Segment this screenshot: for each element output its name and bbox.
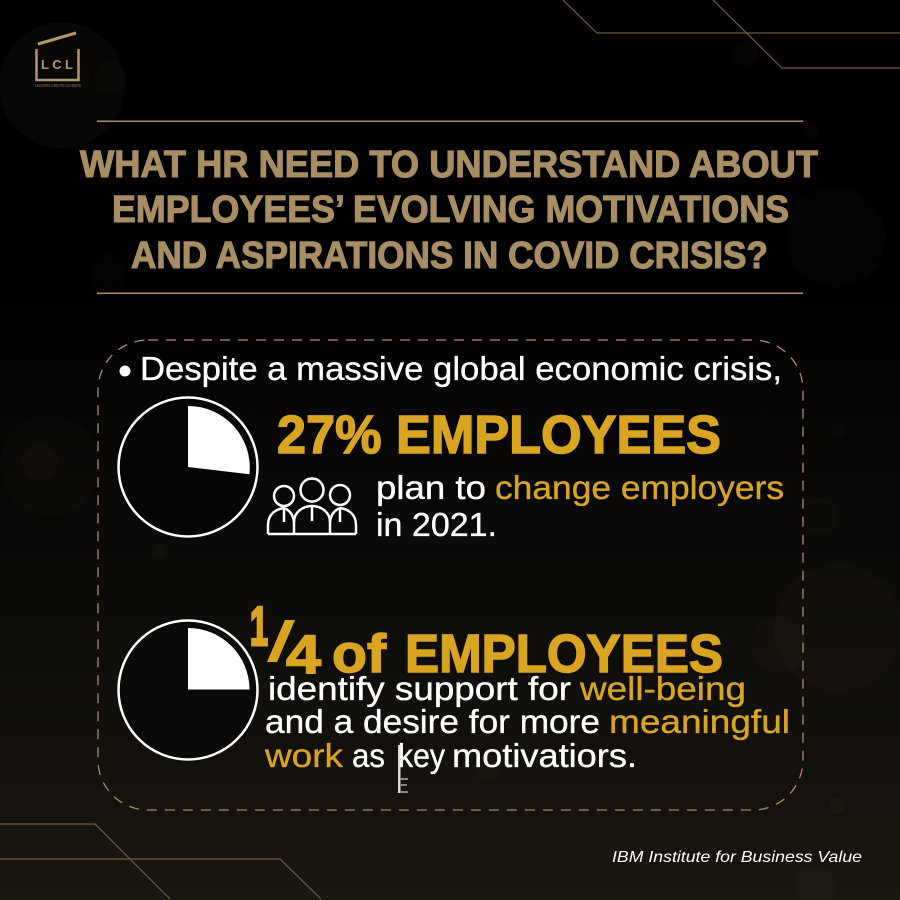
pie chart: 27% [118,398,258,536]
title: EMPLOYEES’ EVOLVING MOTIVATIONS [112,189,789,231]
headline: 1/4 of employees: of [332,624,387,684]
logo: LCL: LCL [41,57,73,72]
text: plan to change employers: in 2021. [376,506,497,543]
source credit: IBM Institute for Business Value [612,849,862,866]
title: AND ASPIRATIONS IN COVID CRISIS? [131,235,768,277]
text: identify support: well-being [579,670,746,707]
intro sentence: Despite a massive global economic crisis, [140,350,782,387]
icon: people group [268,478,356,534]
logo: LCL [35,33,81,88]
text: plan to change employers [376,469,784,543]
title [80,144,818,277]
title rule bottom [97,292,803,294]
text: plan to change employers: change employers [495,469,784,506]
text: identify support: key [398,737,445,774]
headline: 27% employees: 27% EMPLOYEES [277,405,721,465]
text: identify support: work [264,737,344,774]
text: identify support [264,670,790,774]
title: WHAT HR NEED TO UNDERSTAND ABOUT [80,144,818,186]
cursor artifact [398,745,408,793]
text: identify support: and a desire for more [265,703,600,740]
headline: 1/4 of employees: EMPLOYEES [405,624,723,684]
headline: 1/4 of employees [250,595,723,685]
headline: 1/4 of employees: 4 [286,623,321,685]
title rule top [97,120,803,122]
text: identify support: motivatiors. [452,737,637,774]
text: identify support: identify support for [268,670,571,707]
text: identify support: as [352,737,385,774]
logo: LCL: LEADERS CREATE LEADERS [35,83,81,88]
pie chart: one quarter [118,620,258,760]
text: plan to change employers: plan to [376,469,486,506]
headline: 1/4 of employees: 1 [250,595,268,657]
text: identify support: meaningful [609,703,790,740]
dashed panel [98,340,803,810]
